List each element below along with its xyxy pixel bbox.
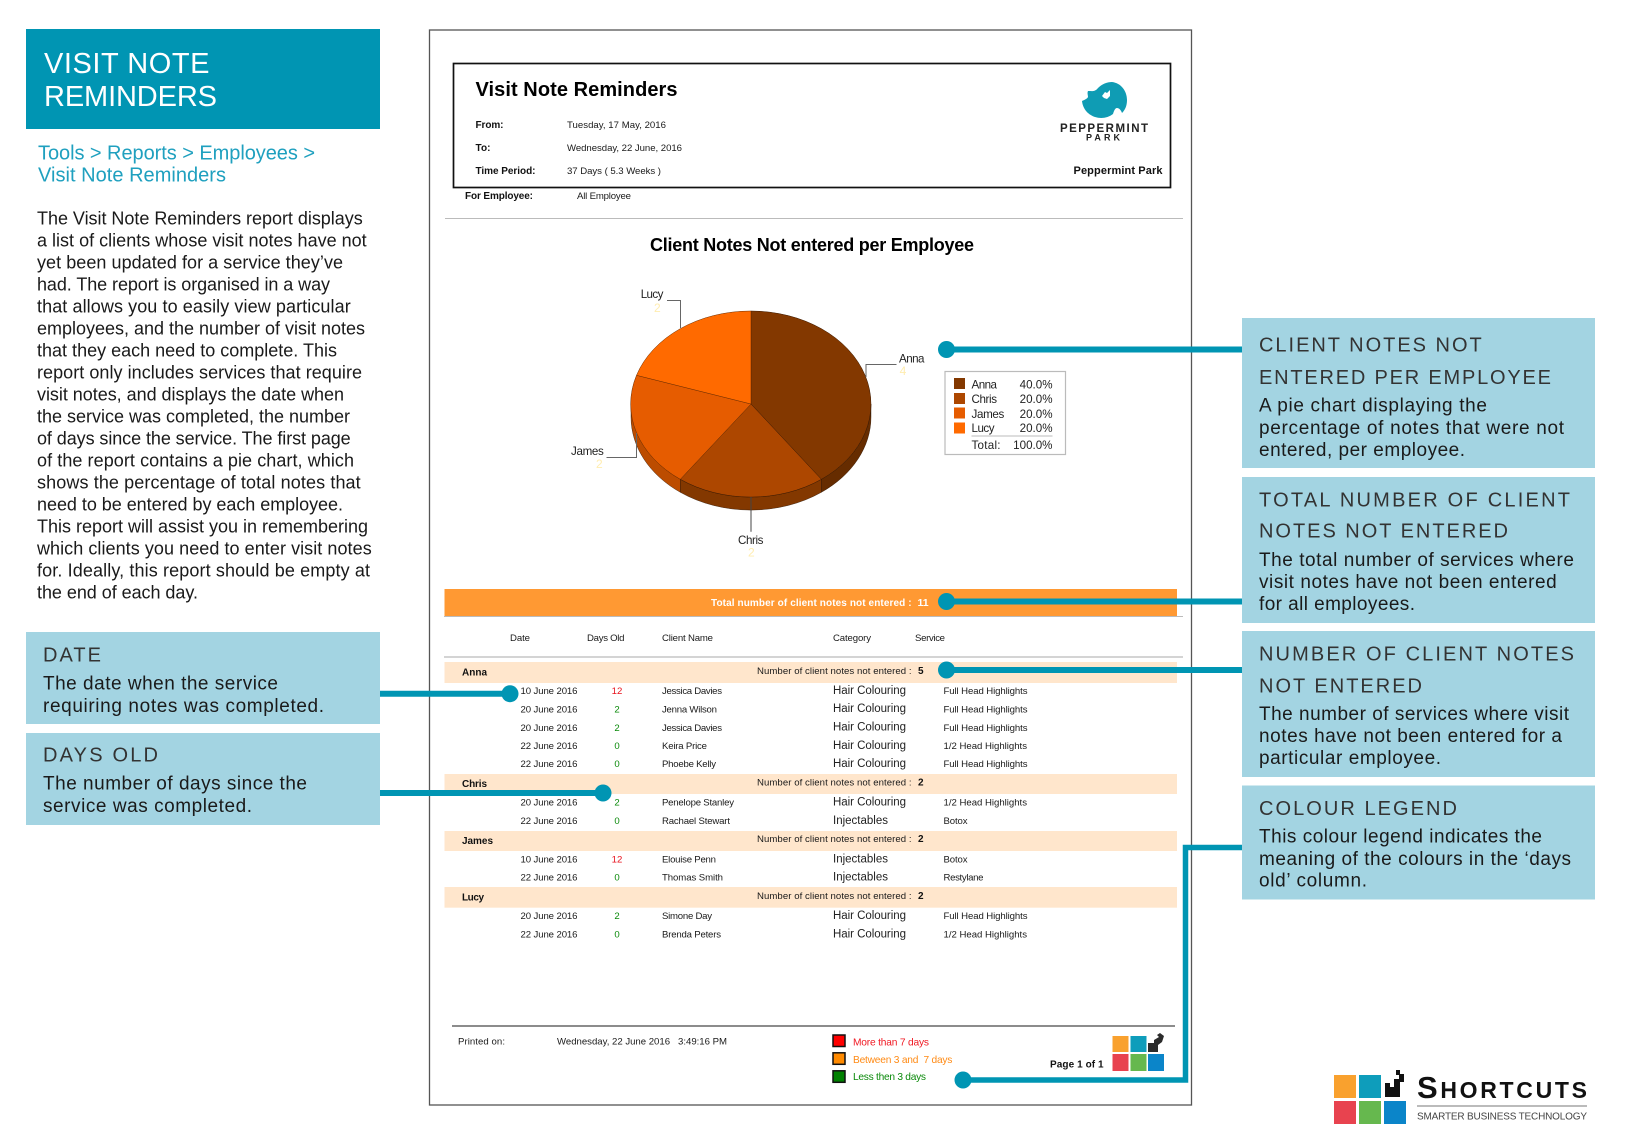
group band: Lucy: 2	[918, 891, 924, 902]
report header box: Wednesday, 22 June, 2016	[567, 143, 682, 154]
report header box: 37 Days ( 5.3 Weeks )	[567, 166, 661, 177]
table column headers	[444, 633, 1183, 657]
pie chart legend: James	[972, 408, 1005, 421]
row: Brenda Peters: 1/2 Head Highlights	[944, 930, 1027, 941]
group band: James: 2	[918, 834, 924, 845]
logo: Shortcuts: SMARTER BUSINESS TECHNOLOGY	[1417, 1111, 1587, 1122]
row: Penelope Stanley	[520, 797, 1027, 809]
report header box: To:	[476, 143, 490, 154]
intro description text: that they each need to complete. This	[37, 340, 337, 360]
row: Thomas Smith: Restylane	[944, 873, 984, 884]
row: Brenda Peters: Hair Colouring	[833, 928, 906, 940]
group band: Lucy: Number of client notes not entered :	[757, 891, 912, 902]
printed on timestamp	[458, 1036, 727, 1048]
row: Phoebe Kelly: Full Head Highlights	[944, 759, 1028, 770]
title banner: VISIT NOTE	[44, 48, 210, 80]
callout: days old: The number of days since the	[43, 773, 307, 794]
pie label: Anna: 4	[900, 364, 907, 378]
row: Elouise Penn: Injectables	[833, 854, 888, 866]
row: Elouise Penn: 12	[612, 855, 622, 866]
row: Rachael Stewart: Injectables	[833, 815, 888, 827]
title banner: REMINDERS	[44, 81, 217, 113]
row: Elouise Penn: 10 June 2016	[520, 855, 578, 866]
row: Jenna Wilson: Jenna Wilson	[662, 705, 717, 716]
pie label: Chris: 2	[748, 546, 755, 560]
row: Phoebe Kelly: Phoebe Kelly	[662, 759, 716, 770]
callout: number of client notes not entered: particular employee.	[1259, 748, 1441, 769]
pie slice: Anna 40%	[751, 311, 871, 479]
row: Phoebe Kelly	[520, 758, 1028, 770]
intro description text: that allows you to easily view particular	[37, 296, 351, 316]
group band: Chris: 2	[918, 778, 924, 789]
row: Rachael Stewart	[520, 815, 968, 827]
row: Jessica Davies second: 2	[614, 723, 620, 734]
group band: Chris	[444, 774, 1177, 794]
intro description text: The Visit Note Reminders report displays	[37, 208, 363, 228]
for employee filter: For Employee:	[465, 191, 533, 202]
arrow: date connector	[380, 685, 518, 702]
pie label: Chris	[738, 497, 764, 560]
row: Jessica Davies second	[520, 722, 1028, 734]
callout: total number of client notes not entered: NOTES NOT ENTERED	[1259, 521, 1508, 543]
group band: James	[444, 831, 1177, 851]
callout: number of client notes not entered	[1242, 631, 1595, 777]
group band: Anna	[444, 662, 1177, 683]
intro description text: for. Ideally, this report should be empty at	[37, 560, 370, 580]
group band: Chris: Chris	[462, 779, 487, 790]
row: Thomas Smith	[520, 872, 984, 884]
callout: date: requiring notes was completed.	[43, 696, 324, 717]
intro description text: report only includes services that require	[37, 362, 362, 382]
report header box	[454, 64, 1170, 188]
row: Penelope Stanley: 1/2 Head Highlights	[944, 798, 1027, 809]
icon: small Shortcuts logo	[1112, 1033, 1164, 1071]
total notes bar: Total number of client notes not entered :	[711, 598, 912, 609]
intro description text: This report will assist you in remembering	[37, 516, 368, 536]
row: Jenna Wilson: Hair Colouring	[833, 703, 906, 715]
breadcrumb navigation path	[38, 142, 315, 186]
table column headers: Days Old	[587, 633, 624, 644]
group band: James: Number of client notes not entered :	[757, 834, 912, 845]
group band: Lucy	[444, 887, 1177, 908]
row: Brenda Peters: Brenda Peters	[662, 930, 721, 941]
callout: number of client notes not entered: notes have not been entered for a	[1259, 726, 1562, 747]
row: Brenda Peters: 0	[614, 930, 620, 941]
intro description text: a list of clients whose visit notes have not	[37, 230, 367, 250]
pie label: Lucy	[641, 288, 680, 328]
row: Simone Day	[520, 910, 1028, 922]
intro description text: the end of each day.	[37, 582, 198, 602]
report header box: Peppermint Park	[1074, 165, 1163, 177]
row: Elouise Penn: Botox	[944, 855, 968, 866]
days old colour legend: Less then 3 days	[853, 1072, 926, 1083]
row: Jessica Davies: Jessica Davies	[662, 686, 722, 697]
days old colour legend: Between 3 and 7 days	[853, 1055, 952, 1066]
pie label: James: 2	[596, 457, 603, 471]
callout: number of client notes not entered: The number of services where visit	[1259, 704, 1570, 725]
row: Keira Price	[520, 740, 1027, 752]
callout: colour legend: old’ column.	[1259, 871, 1367, 892]
row: Elouise Penn: Elouise Penn	[662, 855, 716, 866]
intro description text: visit notes, and displays the date when	[37, 384, 344, 404]
row: Jessica Davies	[520, 685, 1028, 697]
pie label: James	[571, 433, 636, 471]
printed on timestamp: Printed on:	[458, 1036, 505, 1048]
row: Rachael Stewart: Rachael Stewart	[662, 816, 730, 827]
callout: colour legend	[1242, 786, 1595, 900]
intro description text	[36, 208, 372, 602]
arrow: days old connector	[380, 784, 612, 802]
row: Jessica Davies: 10 June 2016	[520, 686, 578, 697]
row: Thomas Smith: Thomas Smith	[662, 873, 723, 884]
intro description text: employees, and the number of visit notes	[37, 318, 365, 338]
callout: number of client notes not entered: NUMBER OF CLIENT NOTES	[1259, 644, 1574, 666]
arrow: employee notes connector	[938, 662, 1242, 678]
row: Simone Day: Hair Colouring	[833, 910, 906, 922]
row: Rachael Stewart: 22 June 2016	[520, 816, 578, 827]
arrow: total notes connector	[938, 593, 1242, 610]
intro description text: which clients you need to enter visit notes	[36, 538, 372, 558]
callout: client notes not entered per employee: percentage of notes that were not	[1259, 418, 1565, 439]
group band: Anna: Anna	[462, 668, 487, 679]
breadcrumb navigation path: Tools > Reports > Employees >	[38, 142, 315, 164]
intro description text: of the report contains a pie chart, which	[37, 450, 354, 470]
row: Keira Price: 1/2 Head Highlights	[944, 741, 1027, 752]
report page frame	[430, 30, 1192, 1105]
pie chart legend: Total:	[972, 439, 1000, 452]
pie label: Anna	[866, 353, 925, 378]
for employee filter: All Employee	[577, 191, 631, 202]
arrow: pie chart connector	[938, 341, 1242, 358]
row: Jessica Davies second: Full Head Highlights	[944, 723, 1028, 734]
total notes bar: 11	[918, 597, 929, 609]
callout: total number of client notes not entered: for all employees.	[1259, 594, 1415, 615]
row: Thomas Smith: 0	[614, 873, 620, 884]
pie slice: Lucy 20%	[636, 311, 751, 404]
pie chart legend: 40.0%	[1020, 378, 1052, 392]
row: Keira Price: Keira Price	[662, 741, 707, 752]
row: Simone Day: 2	[614, 911, 620, 922]
row: Simone Day: 20 June 2016	[520, 911, 578, 922]
report header box: From:	[476, 120, 504, 131]
row: Rachael Stewart: Botox	[944, 816, 968, 827]
row: Thomas Smith: Injectables	[833, 872, 888, 884]
pie slice: Chris 20%	[680, 404, 821, 497]
group band: Anna: 5	[918, 666, 924, 677]
pie label: Lucy: Lucy	[641, 288, 664, 301]
row: Jenna Wilson: 20 June 2016	[520, 705, 578, 716]
callout: total number of client notes not entered: TOTAL NUMBER OF CLIENT	[1259, 490, 1570, 512]
icon: Peppermint Park logo	[1060, 82, 1148, 142]
logo: Shortcuts	[1334, 1070, 1587, 1124]
callout: total number of client notes not entered: The total number of services where	[1259, 550, 1574, 571]
callout: colour legend: This colour legend indicates the	[1259, 827, 1542, 848]
row: Jenna Wilson: 2	[614, 705, 620, 716]
pie chart legend: 20.0%	[1020, 393, 1052, 406]
pie chart	[631, 311, 871, 510]
row: Phoebe Kelly: 0	[614, 759, 620, 770]
report header box: Tuesday, 17 May, 2016	[567, 120, 666, 131]
pie chart legend: Lucy	[972, 422, 995, 435]
callout: total number of client notes not entered: visit notes have not been entered	[1259, 572, 1557, 593]
row: Simone Day: Full Head Highlights	[944, 911, 1028, 922]
row: Keira Price: 0	[614, 741, 620, 752]
page number: Page 1 of 1	[1050, 1060, 1104, 1071]
group band: Lucy: Lucy	[462, 893, 484, 904]
row: Thomas Smith: 22 June 2016	[520, 873, 578, 884]
pie label: Chris: Chris	[738, 534, 764, 547]
row: Phoebe Kelly: Hair Colouring	[833, 758, 906, 770]
report header box: Time Period:	[476, 166, 536, 177]
group band: Anna: Number of client notes not entered :	[757, 666, 912, 677]
row: Penelope Stanley: Penelope Stanley	[662, 798, 734, 809]
intro description text: shows the percentage of total notes that	[37, 472, 361, 492]
callout: client notes not entered per employee: A pie chart displaying the	[1259, 396, 1487, 417]
callout: client notes not entered per employee: ENTERED PER EMPLOYEE	[1259, 367, 1551, 389]
row: Keira Price: Hair Colouring	[833, 740, 906, 752]
row: Brenda Peters: 22 June 2016	[520, 930, 578, 941]
intro description text: yet been updated for a service they’ve	[37, 252, 343, 272]
row: Jessica Davies: Hair Colouring	[833, 685, 906, 697]
icon: Peppermint Park logo: PARK	[1086, 132, 1120, 142]
row: Jessica Davies: Full Head Highlights	[944, 686, 1028, 697]
row: Penelope Stanley: Hair Colouring	[833, 797, 906, 809]
callout: date: The date when the service	[43, 673, 278, 694]
pie chart legend: 20.0%	[1020, 408, 1052, 421]
row: Brenda Peters	[520, 928, 1027, 941]
callout: number of client notes not entered: NOT ENTERED	[1259, 676, 1422, 698]
pie chart legend	[945, 372, 1066, 454]
pie label: Lucy: 2	[654, 301, 661, 315]
group band: James: James	[462, 836, 493, 847]
report header box: Visit Note Reminders	[476, 79, 678, 101]
arrow: colour legend connector	[954, 848, 1242, 1088]
intro description text: the service was completed, the number	[37, 406, 350, 426]
breadcrumb navigation path: Visit Note Reminders	[38, 164, 226, 186]
callout: days old: service was completed.	[43, 796, 252, 817]
group band: Chris: Number of client notes not entered :	[757, 778, 912, 789]
printed on timestamp: Wednesday, 22 June 2016 3:49:16 PM	[557, 1036, 727, 1048]
intro description text: need to be entered by each employee.	[37, 494, 343, 514]
table column headers: Category	[833, 633, 871, 644]
callout: days old	[26, 733, 380, 825]
pie label: James: James	[571, 445, 604, 458]
callout: date	[26, 632, 380, 724]
pie chart legend: Chris	[972, 393, 997, 406]
row: Jessica Davies second: 20 June 2016	[520, 723, 578, 734]
row: Penelope Stanley: 20 June 2016	[520, 798, 578, 809]
callout: client notes not entered per employee: entered, per employee.	[1259, 440, 1465, 461]
pie slice: James 20%	[631, 375, 751, 479]
pie label: Anna: Anna	[899, 353, 925, 366]
total notes bar	[444, 589, 1183, 616]
intro description text: had. The report is organised in a way	[37, 274, 330, 294]
for employee filter	[465, 191, 631, 202]
row: Phoebe Kelly: 22 June 2016	[520, 759, 578, 770]
pie chart legend: 100.0%	[1013, 439, 1052, 452]
logo: Shortcuts: SHORTCUTS	[1417, 1070, 1587, 1105]
table column headers: Date	[510, 633, 530, 644]
row: Jenna Wilson: Full Head Highlights	[944, 705, 1028, 716]
callout: colour legend: COLOUR LEGEND	[1259, 798, 1457, 820]
row: Penelope Stanley: 2	[614, 798, 620, 809]
icon: Peppermint Park logo: PEPPERMINT	[1060, 123, 1148, 135]
callout: total number of client notes not entered	[1242, 477, 1595, 623]
callout: date: DATE	[43, 645, 101, 667]
intro description text: of days since the service. The first page	[37, 428, 351, 448]
title banner	[26, 29, 380, 129]
pie chart heading: Client Notes Not entered per Employee	[650, 235, 974, 255]
pie chart legend: Anna	[972, 378, 998, 392]
row: Elouise Penn	[520, 854, 968, 866]
days old colour legend: More than 7 days	[853, 1038, 929, 1049]
row: Simone Day: Simone Day	[662, 911, 712, 922]
pie side walls	[631, 404, 871, 510]
row: Jessica Davies second: Jessica Davies	[662, 723, 722, 734]
callout: colour legend: meaning of the colours in the ‘days	[1259, 849, 1571, 870]
callout: client notes not entered per employee: CLIENT NOTES NOT	[1259, 335, 1482, 357]
days old colour legend	[833, 1035, 952, 1083]
row: Jessica Davies: 12	[612, 686, 622, 697]
row: Jenna Wilson	[520, 703, 1028, 716]
callout: client notes not entered per employee	[1242, 318, 1595, 468]
row: Rachael Stewart: 0	[614, 816, 620, 827]
row: Jessica Davies second: Hair Colouring	[833, 722, 906, 734]
table column headers: Service	[915, 633, 945, 644]
table column headers: Client Name	[662, 633, 713, 644]
pie chart legend: 20.0%	[1020, 422, 1052, 435]
row: Keira Price: 22 June 2016	[520, 741, 578, 752]
callout: days old: DAYS OLD	[43, 745, 158, 767]
